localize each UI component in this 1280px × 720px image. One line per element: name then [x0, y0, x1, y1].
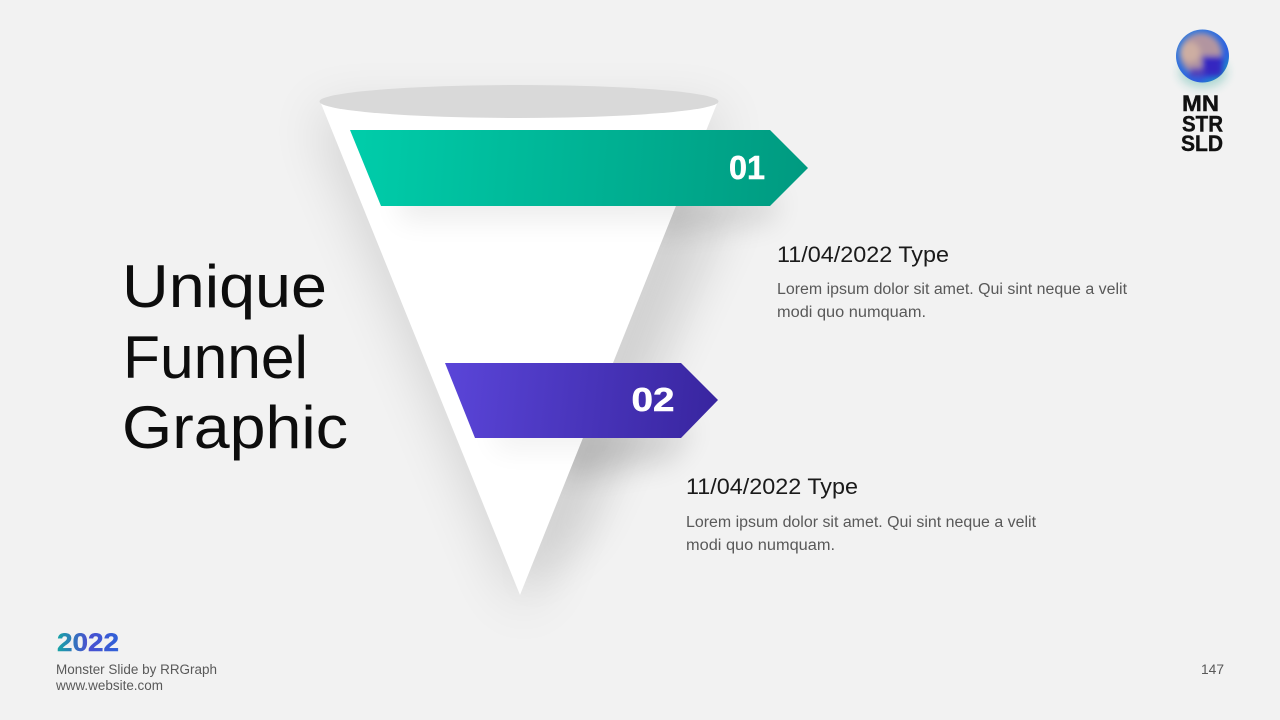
page number: 147 [1201, 661, 1224, 677]
title [122, 253, 348, 461]
funnel graphic [315, 85, 780, 615]
ribbon 01 number: 01 [729, 149, 765, 186]
title: Funnel [123, 324, 308, 391]
text block 02: modi quo numquam. [686, 537, 835, 554]
ribbon 02 [445, 363, 718, 438]
ribbon 02 number: 02 [632, 381, 674, 418]
logo text: SLD [1181, 131, 1223, 156]
logo glow [1179, 56, 1227, 88]
title: Unique [122, 253, 327, 320]
shadows on cone [402, 206, 697, 444]
text block 02: Lorem ipsum dolor sit amet. Qui sint neque a velit [686, 514, 1037, 531]
ribbon 01 [350, 130, 808, 206]
logo [1176, 30, 1229, 156]
ribbon 02 cast shadow [560, 425, 695, 478]
funnel opening [320, 85, 718, 118]
funnel right shadow [520, 210, 740, 595]
logo text: STR [1182, 112, 1223, 136]
title: Graphic [122, 394, 348, 461]
logo text [1181, 91, 1223, 156]
logo text: MN [1182, 91, 1219, 116]
text block 02 [686, 474, 1037, 554]
text block 01: modi quo numquam. [777, 304, 926, 321]
ribbon 01 cast shadow [650, 195, 780, 232]
text block 01 [777, 242, 1128, 321]
footer credit: www.website.com [55, 678, 163, 693]
text block 02: 11/04/2022 Type [686, 474, 858, 499]
funnel halo shadow [315, 112, 723, 615]
funnel cone [320, 101, 718, 595]
ribbon 02 arrow [445, 363, 718, 438]
footer year: 2022 [57, 629, 119, 657]
logo sphere [1176, 30, 1229, 82]
footer credit [55, 662, 217, 693]
footer credit: Monster Slide by RRGraph [56, 662, 217, 677]
text block 01: Lorem ipsum dolor sit amet. Qui sint neque a velit [777, 281, 1128, 298]
ribbon 01 arrow [350, 130, 808, 206]
text block 01: 11/04/2022 Type [777, 242, 949, 267]
